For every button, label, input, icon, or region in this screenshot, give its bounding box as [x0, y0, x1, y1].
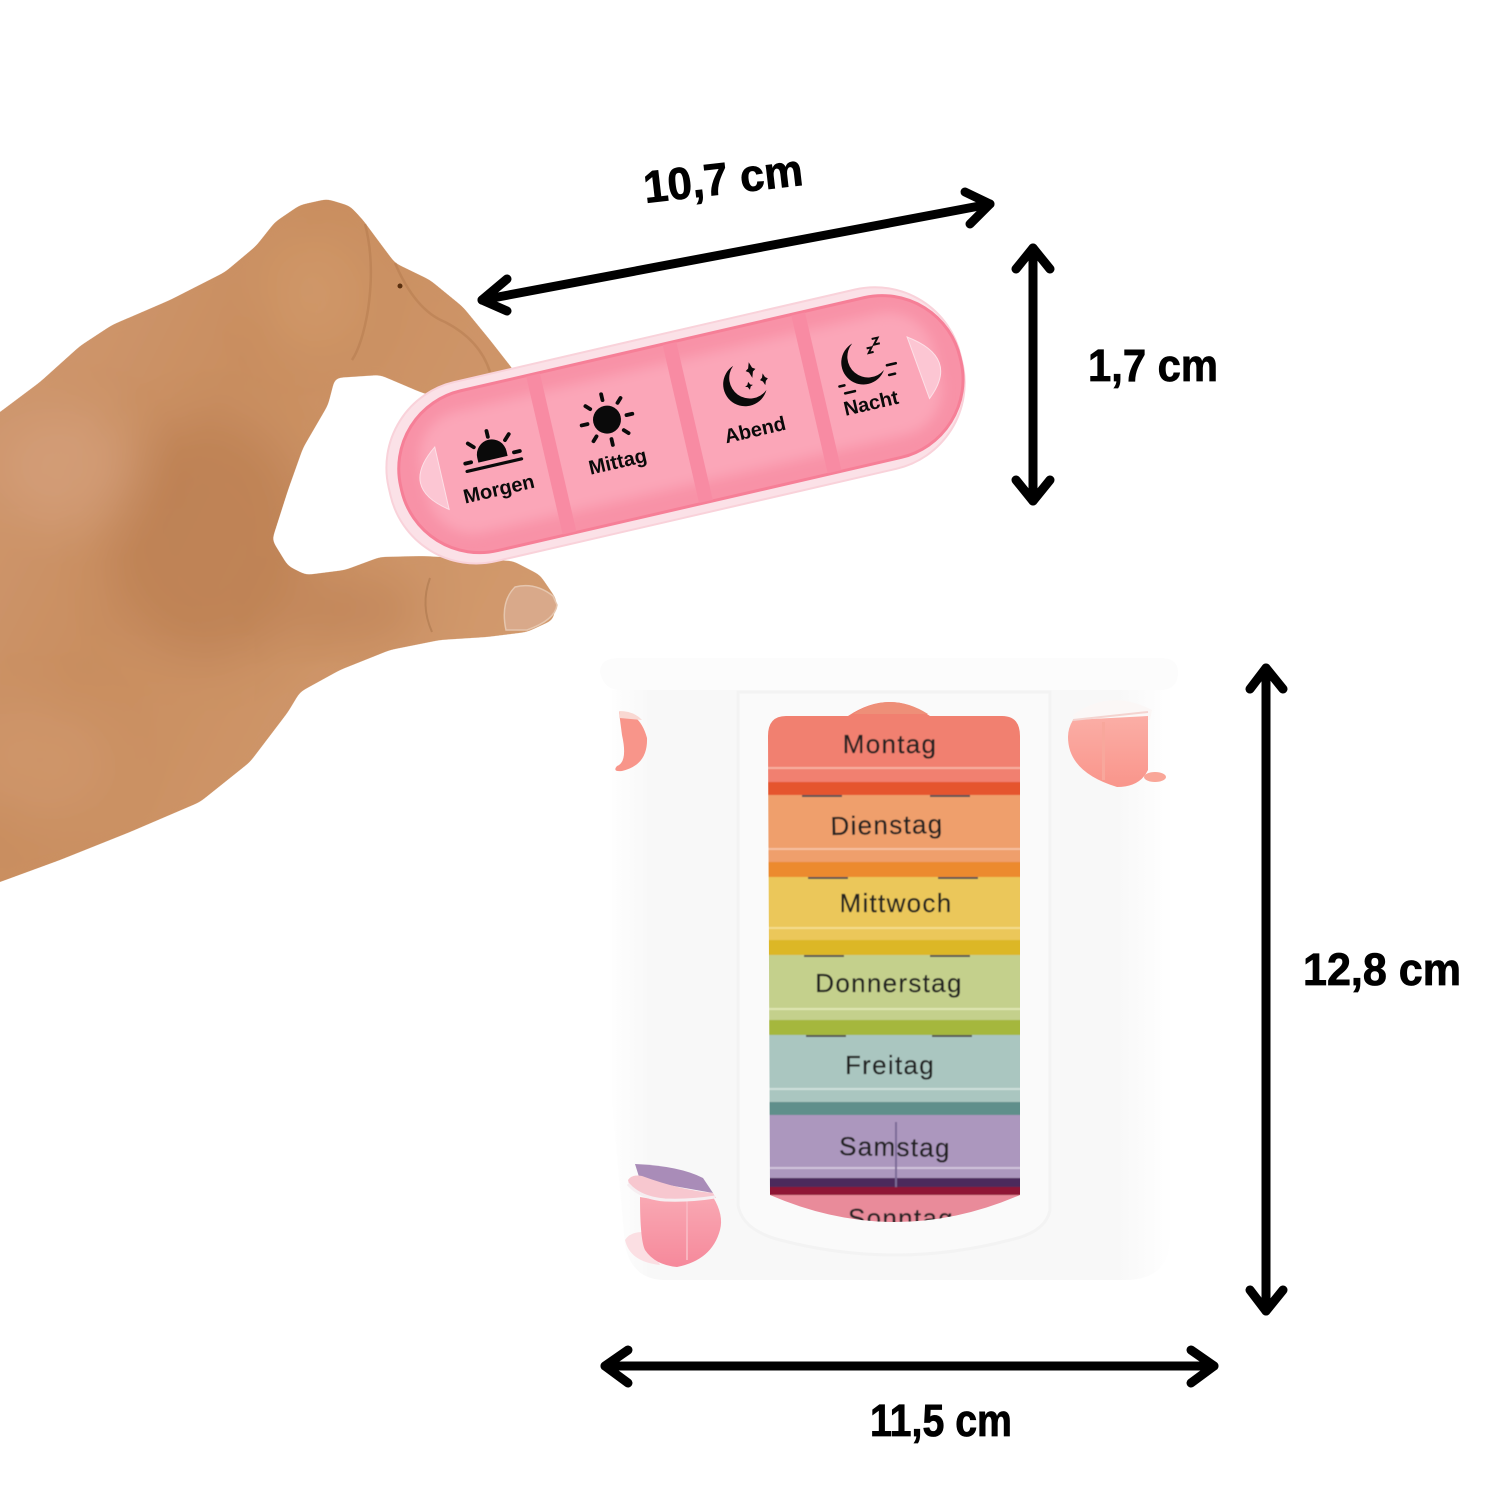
Montag drawer tab: [853, 702, 928, 714]
drawer window: [766, 690, 1022, 1255]
arrow: width of compartment: [482, 192, 990, 311]
drawer: Sonntag: Sonntag: [848, 1203, 954, 1233]
tower lid: [600, 658, 1178, 690]
label: 1,7 cm: 1,7 cm: [1088, 340, 1218, 391]
divider 1: [526, 374, 576, 535]
drawer: Freitag: [766, 1035, 1022, 1115]
drawer: Sonntag: [770, 1194, 1020, 1222]
tower body: [612, 690, 1170, 1280]
divider 2: [663, 342, 713, 503]
pink drawer top right opening: [1068, 700, 1166, 787]
label: Nacht: Nacht: [842, 387, 901, 421]
finger creases: [352, 224, 490, 372]
lighter top face: [410, 304, 951, 543]
drawer: Mittwoch: [766, 877, 1022, 955]
label: Abend: Abend: [722, 413, 788, 448]
icon: moon with zzz: [831, 335, 900, 394]
thumb nail: [504, 586, 557, 630]
label: 12,8 cm: 12,8 cm: [1303, 944, 1461, 995]
drawer: Samstag: [766, 1115, 1022, 1195]
pink drawer top left opening: [615, 711, 647, 771]
drawer: Dienstag: Dienstag: [830, 809, 944, 841]
clear lid: [369, 270, 982, 581]
drawer: Samstag: Samstag: [839, 1131, 951, 1163]
left finger tab: [413, 447, 449, 514]
pink body: [383, 280, 979, 569]
label: Mittag: Mittag: [587, 445, 649, 480]
pill tower dispenser: [615, 690, 1166, 1267]
arrow: width of tower: [605, 1350, 1214, 1383]
label: Morgen: Morgen: [461, 471, 537, 509]
arrow: height of compartment: [1016, 248, 1050, 501]
drawer: Montag: [768, 702, 1020, 796]
arrow: height of tower: [1250, 668, 1283, 1311]
drawer: Dienstag: [766, 795, 1022, 877]
icon: sun: [576, 388, 638, 451]
drawer: Donnerstag: Donnerstag: [815, 968, 963, 998]
right finger tab: [907, 331, 947, 400]
hand holding the compartment: [0, 199, 557, 896]
label: 11,5 cm: 11,5 cm: [870, 1395, 1012, 1446]
divider 3: [791, 312, 841, 473]
front frame: [738, 692, 1050, 1255]
icon: moon and stars: [719, 359, 773, 411]
drawer: Donnerstag: [766, 955, 1022, 1035]
pill compartment, four slots: [369, 270, 982, 581]
drawer: Mittwoch: Mittwoch: [840, 888, 952, 918]
drawer: Montag: Montag: [843, 729, 937, 759]
drawer: Freitag: Freitag: [845, 1050, 935, 1080]
pink drawer bottom left opening: [625, 1164, 721, 1267]
icon: sunrise: [459, 425, 522, 471]
label: 10,7 cm: 10,7 cm: [641, 144, 805, 213]
